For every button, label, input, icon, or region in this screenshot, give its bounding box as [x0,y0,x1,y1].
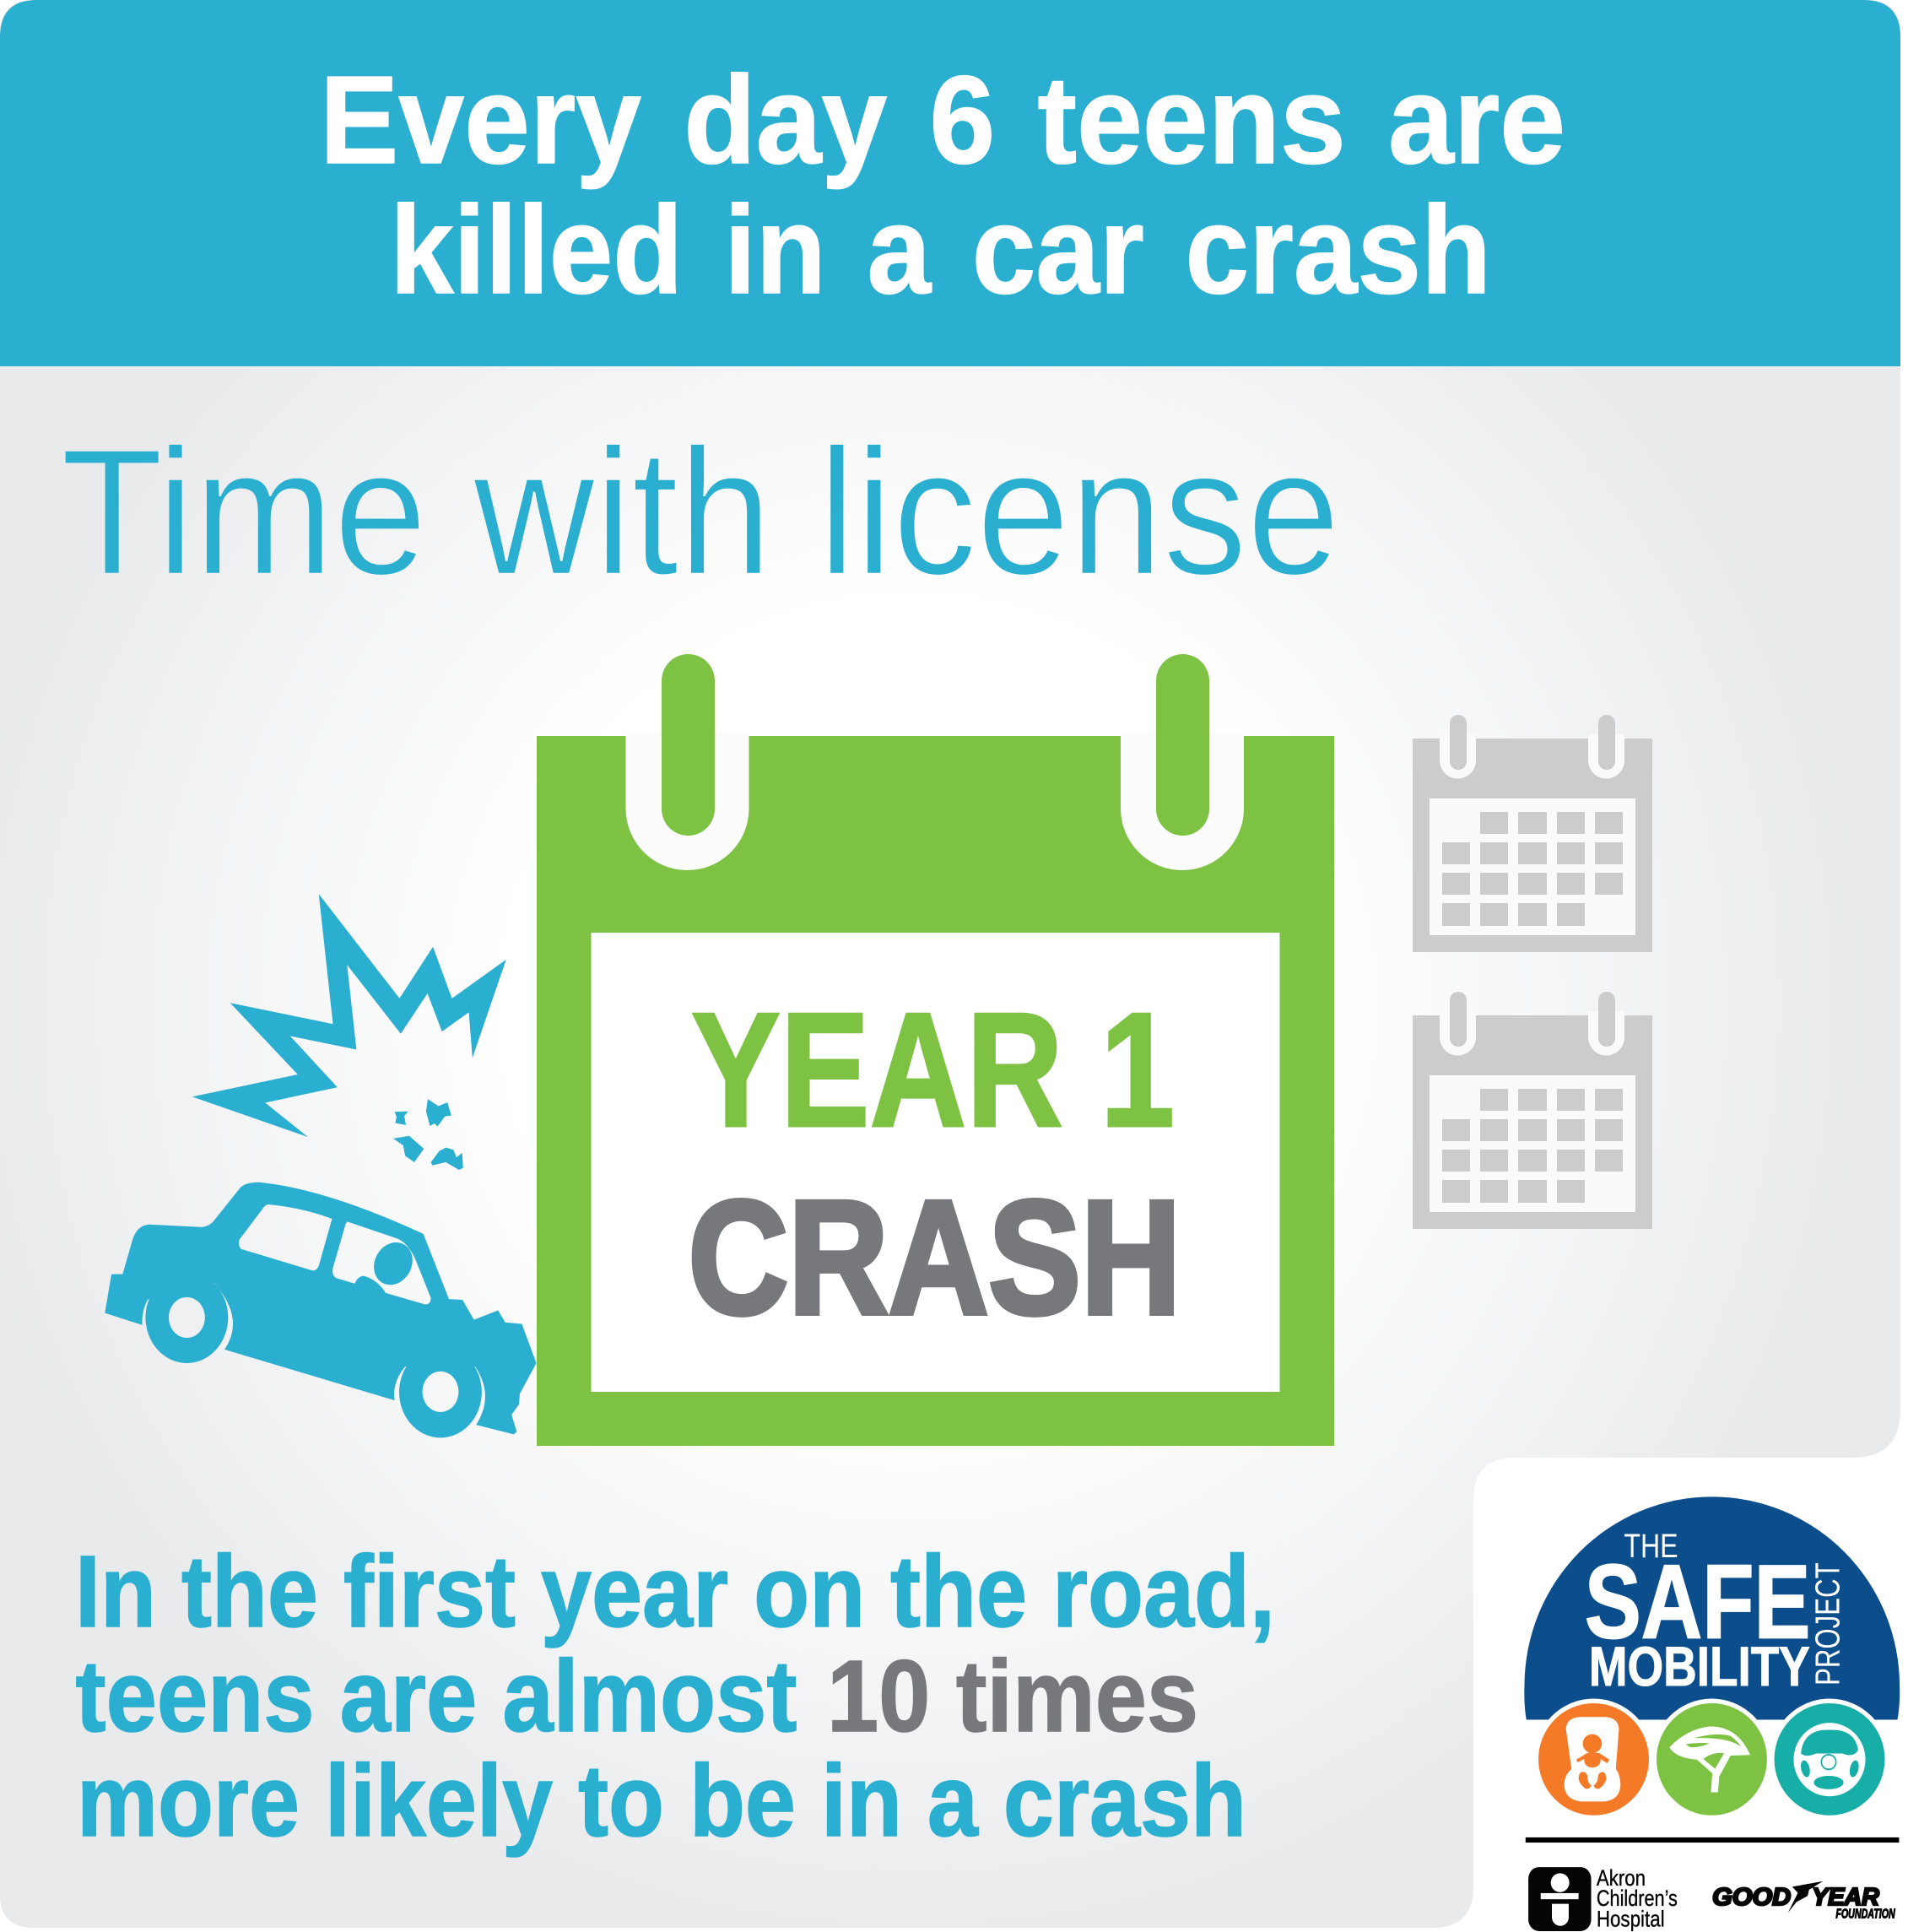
text block: first year statistic: teens are almost [76,1638,797,1753]
title [320,51,1565,320]
header banner [0,0,1900,366]
icon: bike helmet [1652,1698,1771,1820]
label: year 1: YEAR 1 [691,978,1175,1161]
icon: front wheel [399,1346,482,1437]
icon: rear wheel [145,1272,228,1363]
icon: car body [105,1182,537,1434]
logo text: akron children's hospital: Hospital [1597,1908,1665,1932]
logo text: safe: SAFE [1585,1544,1810,1660]
heading: time with license: Time with license [61,412,1340,613]
divider [1526,1837,1899,1843]
logo text: the: THE [1624,1529,1678,1566]
logo: goodyear foundation: GOOD [1712,1883,1791,1910]
calendar: year 3 [1413,992,1652,1229]
logo text: akron children's hospital [1597,1866,1678,1932]
icon: driver head [368,1235,418,1292]
icon: burst [192,894,506,1137]
logo: safe mobility dome [1524,1496,1900,1720]
calendar: year 1 crash [537,654,1334,1446]
calendar: year 2 [1413,715,1652,952]
logo: goodyear foundation [1712,1881,1895,1922]
logo text: akron children's hospital: Children’s [1597,1886,1678,1911]
title: Every day 6 teens are [320,51,1565,190]
logo: akron children's hospital icon [1528,1867,1592,1931]
text block: first year statistic: 10 times [827,1638,1198,1753]
logo text: akron children's hospital: Akron [1597,1866,1646,1891]
title: killed in a car crash [390,181,1491,320]
text block: first year statistic: more likely to be in a crash [77,1743,1246,1858]
logo text: project: PROJECT [1808,1562,1847,1686]
icon: debris [393,1099,463,1170]
logo: goodyear foundation: YEAR [1812,1883,1879,1910]
text block: first year statistic [75,1534,1275,1858]
label: crash: CRASH [689,1166,1181,1348]
icon: car seat [1534,1698,1653,1820]
icon: steering wheel [1770,1698,1889,1820]
text block: first year statistic: In the first year on the road, [75,1534,1275,1648]
icon: crashed car with burst [105,894,537,1437]
logos block [1524,1496,1900,1932]
logo text: mobility: MOBILITY [1589,1636,1810,1697]
